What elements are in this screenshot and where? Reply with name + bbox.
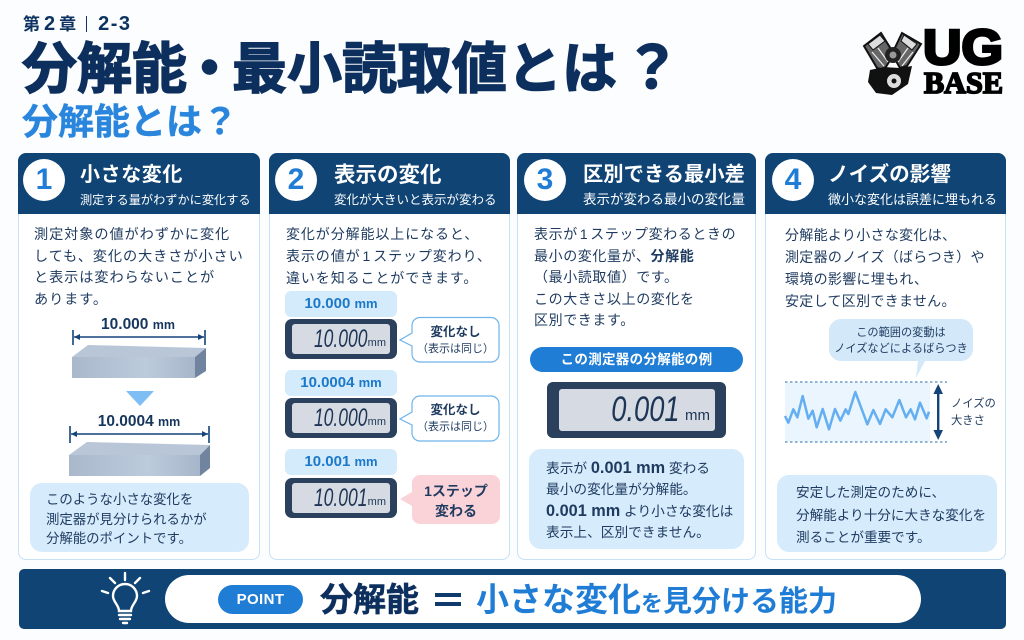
panel 2 body [269, 153, 510, 560]
noise label [951, 397, 996, 427]
value pill 10.001: 10.001 mm [304, 453, 378, 470]
icon: engine [864, 33, 921, 95]
resolution term: 分解能 [320, 581, 419, 618]
bubble 3 text [424, 483, 488, 519]
bubble 3 text: 変わる [435, 503, 477, 519]
noise size arrow [933, 384, 943, 440]
example pill: この測定器の分解能の例 [561, 352, 712, 367]
noise label: ノイズの [951, 398, 996, 410]
bubble 2 text [417, 403, 494, 433]
panel 3 callout: 0.001 mm より小さな変化は [546, 502, 733, 520]
panel 1 number [23, 159, 65, 201]
value pill 10.000 [285, 291, 397, 317]
panel 3 text: 表示が1ステップ変わるときの [534, 226, 736, 242]
value pill 10.000: 10.000 mm [304, 295, 378, 312]
panel 1 text [34, 226, 244, 308]
display 10.000 second: mm [368, 416, 386, 428]
panel 1 callout: 分解能のポイントです。 [46, 531, 192, 546]
bubble text [834, 326, 968, 354]
panel 3 text [534, 226, 736, 328]
panel 4 callout: 安定した測定のために、 [796, 485, 945, 500]
bubble 3 shape [400, 475, 500, 524]
panel 1 text: しても、変化の大きさが小さい [34, 248, 244, 264]
value pill 10.0004: 10.0004 mm [300, 374, 382, 391]
bubble 1 text: 変化なし [430, 325, 480, 339]
definition: 小さな変化を見分ける能力 [476, 581, 837, 618]
panel 3 text: 最小の変化量が、分解能 [534, 248, 694, 264]
panel 1 callout: 測定器が見分けられるかが [46, 512, 207, 527]
panel 1 callout: このような小さな変化を [46, 492, 193, 507]
noise waveform [785, 392, 929, 429]
bubble text: この範囲の変動は [856, 327, 946, 339]
point statement pill [165, 575, 921, 623]
display 10.001: mm [368, 496, 386, 508]
label 10.0004 mm: 10.0004 mm [98, 413, 180, 430]
panel 2 number: 2 [288, 163, 304, 196]
bubble 3 text: 1ステップ [424, 483, 488, 499]
panel 1 text: と表示は変わらないことが [34, 270, 215, 286]
panel 3 heading: 区別できる最小差 [583, 164, 745, 186]
block 2 [69, 442, 210, 476]
panel 3 callout: 最小の変化量が分解能。 [546, 482, 697, 497]
bottom point bar [19, 569, 1006, 629]
value pill 10.0004 [285, 370, 397, 396]
bubble 2 text: （表示は同じ） [417, 421, 494, 433]
panel 2 text: 表示の値が1ステップ変わり、 [286, 248, 492, 264]
POINT badge [218, 585, 303, 614]
display 10.001: 10.001 [313, 484, 367, 512]
panel 3 text: 区別できます。 [534, 312, 635, 328]
block 1 [72, 345, 206, 378]
panel 4 text: 環境の影響に埋もれ、 [785, 271, 928, 287]
panel 4 text: 安定して区別できません。 [785, 293, 956, 309]
panel 1 text: 測定対象の値がわずかに変化 [34, 227, 230, 243]
panel 3 number [524, 159, 566, 201]
display 0.001 [547, 382, 726, 438]
logo: UG BASE [862, 26, 1003, 98]
noise label: 大きさ [951, 415, 985, 427]
panel 2 heading: 表示の変化 [334, 163, 442, 187]
arrow down [126, 391, 154, 406]
display 0.001: mm [685, 407, 710, 424]
panel 2 text: 違いを知ることができます。 [286, 270, 478, 286]
dimension arrow 2 [70, 426, 209, 443]
bubble 1 text [417, 325, 494, 355]
bubble 1 text: （表示は同じ） [417, 343, 494, 355]
POINT badge: POINT [237, 591, 284, 608]
panel 3 callout: 表示が 0.001 mm 変わる [546, 459, 710, 477]
panel 4 text: 測定器のノイズ（ばらつき）や [785, 249, 985, 265]
panel 2 header [269, 153, 510, 214]
panel 4 callout [777, 475, 997, 552]
panel 1 subheading: 測定する量がわずかに変化する [80, 193, 251, 207]
bubble text: ノイズなどによるばらつき [834, 342, 968, 354]
panel 4 header [765, 153, 1006, 214]
diagram: blocks with dimensions [69, 316, 210, 476]
example pill [530, 347, 743, 372]
panel 2 subheading: 変化が大きいと表示が変わる [334, 193, 497, 207]
display 10.000: mm [368, 337, 386, 349]
equals sign [435, 593, 461, 606]
bubble 2 text: 変化なし [430, 403, 480, 417]
title: 分解能・最小読取値とは？ [22, 36, 681, 101]
display 10.000 [285, 319, 397, 359]
display 10.000 second [285, 398, 397, 438]
panel 1 header [18, 153, 260, 214]
panel 1 heading: 小さな変化 [80, 164, 183, 186]
dimension arrow 1 [73, 330, 205, 345]
callout bubble shape [829, 319, 973, 378]
panel 3 body [517, 153, 756, 560]
display 0.001: 0.001 [612, 390, 680, 429]
subtitle: 分解能とは？ [22, 101, 238, 142]
display 10.000 second: 10.000 [313, 404, 367, 432]
panel 1 callout [30, 483, 249, 552]
panel 4 callout: 分解能より十分に大きな変化を [796, 508, 986, 522]
noise chart [784, 319, 973, 442]
panel 3 text: この大きさ以上の変化を [534, 291, 695, 307]
panel 1 text: あります。 [34, 292, 108, 308]
panel 3 header [517, 153, 756, 214]
panel 2 text: 変化が分解能以上になると、 [286, 226, 479, 242]
panel 4 text: 分解能より小さな変化は、 [785, 227, 956, 243]
panel 1 number: 1 [36, 163, 52, 196]
bubble 1 shape [400, 318, 499, 362]
bubble shapes [398, 316, 500, 524]
panel 4 number: 4 [785, 163, 801, 196]
display 10.001 [285, 478, 397, 518]
panel 2 text [286, 226, 492, 286]
panel 4 callout: 測ることが重要です。 [796, 530, 931, 545]
chapter label: 第2章 2-3 [23, 13, 132, 35]
panel 3 callout: 表示上、区別できません。 [546, 525, 710, 540]
panel 4 number [772, 159, 814, 201]
panel 2 number [275, 159, 317, 201]
label 10.000 mm: 10.000 mm [101, 316, 175, 333]
panel 4 text [785, 227, 985, 309]
panel 3 number: 3 [537, 163, 553, 196]
panel 1 body [18, 153, 260, 560]
icon: light bulb [100, 572, 150, 624]
panel 3 subheading: 表示が変わる最小の変化量 [583, 192, 745, 207]
noise band [785, 382, 930, 442]
bubble 2 shape [400, 396, 499, 441]
display 10.000: 10.000 [313, 325, 367, 353]
value pill 10.001 [285, 449, 397, 475]
panel 3 callout [529, 449, 744, 549]
panel 4 heading: ノイズの影響 [828, 163, 951, 186]
panel 3 text: （最小読取値）です。 [534, 269, 679, 285]
panel 4 subheading: 微小な変化は誤差に埋もれる [828, 192, 997, 207]
panel 4 body [765, 153, 1006, 560]
